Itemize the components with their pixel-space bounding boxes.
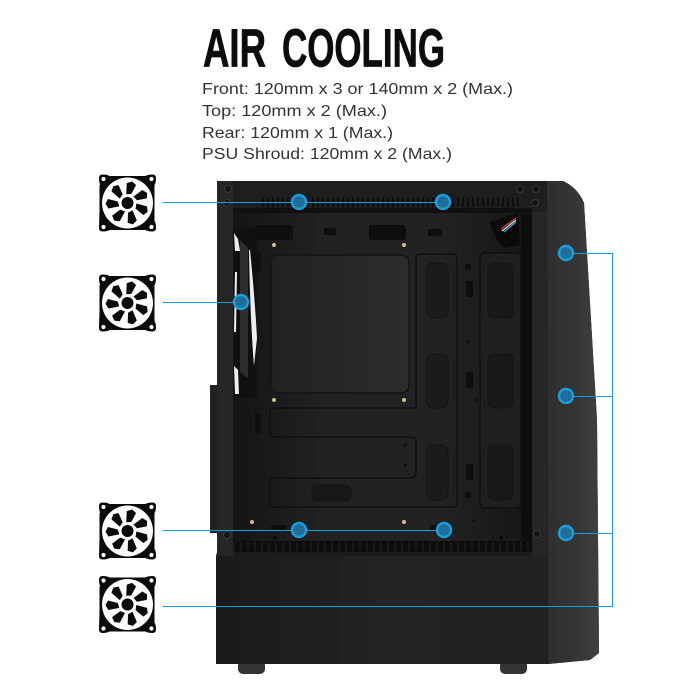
- psu shroud: [216, 556, 547, 664]
- specification text: Rear: 120mm x 1 (Max.): [202, 125, 393, 142]
- right interior channel: [521, 214, 532, 541]
- PC case: [210, 181, 599, 674]
- bottom vent: [233, 541, 532, 552]
- cpu cutout: [271, 255, 409, 393]
- callout dots: [234, 195, 573, 540]
- interior back plate: [233, 210, 532, 552]
- specification text: Top: 120mm x 2 (Max.): [202, 103, 387, 120]
- side panel bulge: [210, 385, 222, 533]
- tray slots: [312, 263, 448, 501]
- case body: [216, 181, 599, 664]
- fan icon: rear: [99, 274, 156, 332]
- rear fan: [233, 228, 257, 398]
- specification text: [202, 81, 513, 163]
- specification text: Front: 120mm x 3 or 140mm x 2 (Max.): [202, 81, 513, 98]
- top frame: [217, 181, 547, 212]
- right tray plate: [480, 253, 521, 508]
- fan icon: psu shroud right: [99, 576, 156, 633]
- specification text: PSU Shroud: 120mm x 2 (Max.): [202, 146, 452, 163]
- cables: [490, 213, 520, 248]
- front panel: [547, 181, 599, 664]
- fan icon: psu shroud left: [99, 502, 156, 560]
- bottom vent hatch: [233, 542, 532, 551]
- title: AIR: [203, 18, 266, 78]
- title: COOLING: [282, 18, 445, 78]
- top vent: [262, 198, 520, 206]
- fan icon: top: [99, 174, 156, 232]
- top tabs and holes: [255, 225, 503, 540]
- tray outline lower: [270, 254, 457, 507]
- brass standoffs: [250, 243, 406, 524]
- right tray slots: [488, 263, 513, 500]
- left frame: [217, 181, 233, 556]
- title: [203, 18, 445, 78]
- callout lines: [163, 202, 612, 606]
- top interior shadow: [233, 208, 532, 213]
- case feet: [238, 660, 527, 674]
- front pillar: [532, 181, 547, 556]
- case screws: [224, 186, 540, 538]
